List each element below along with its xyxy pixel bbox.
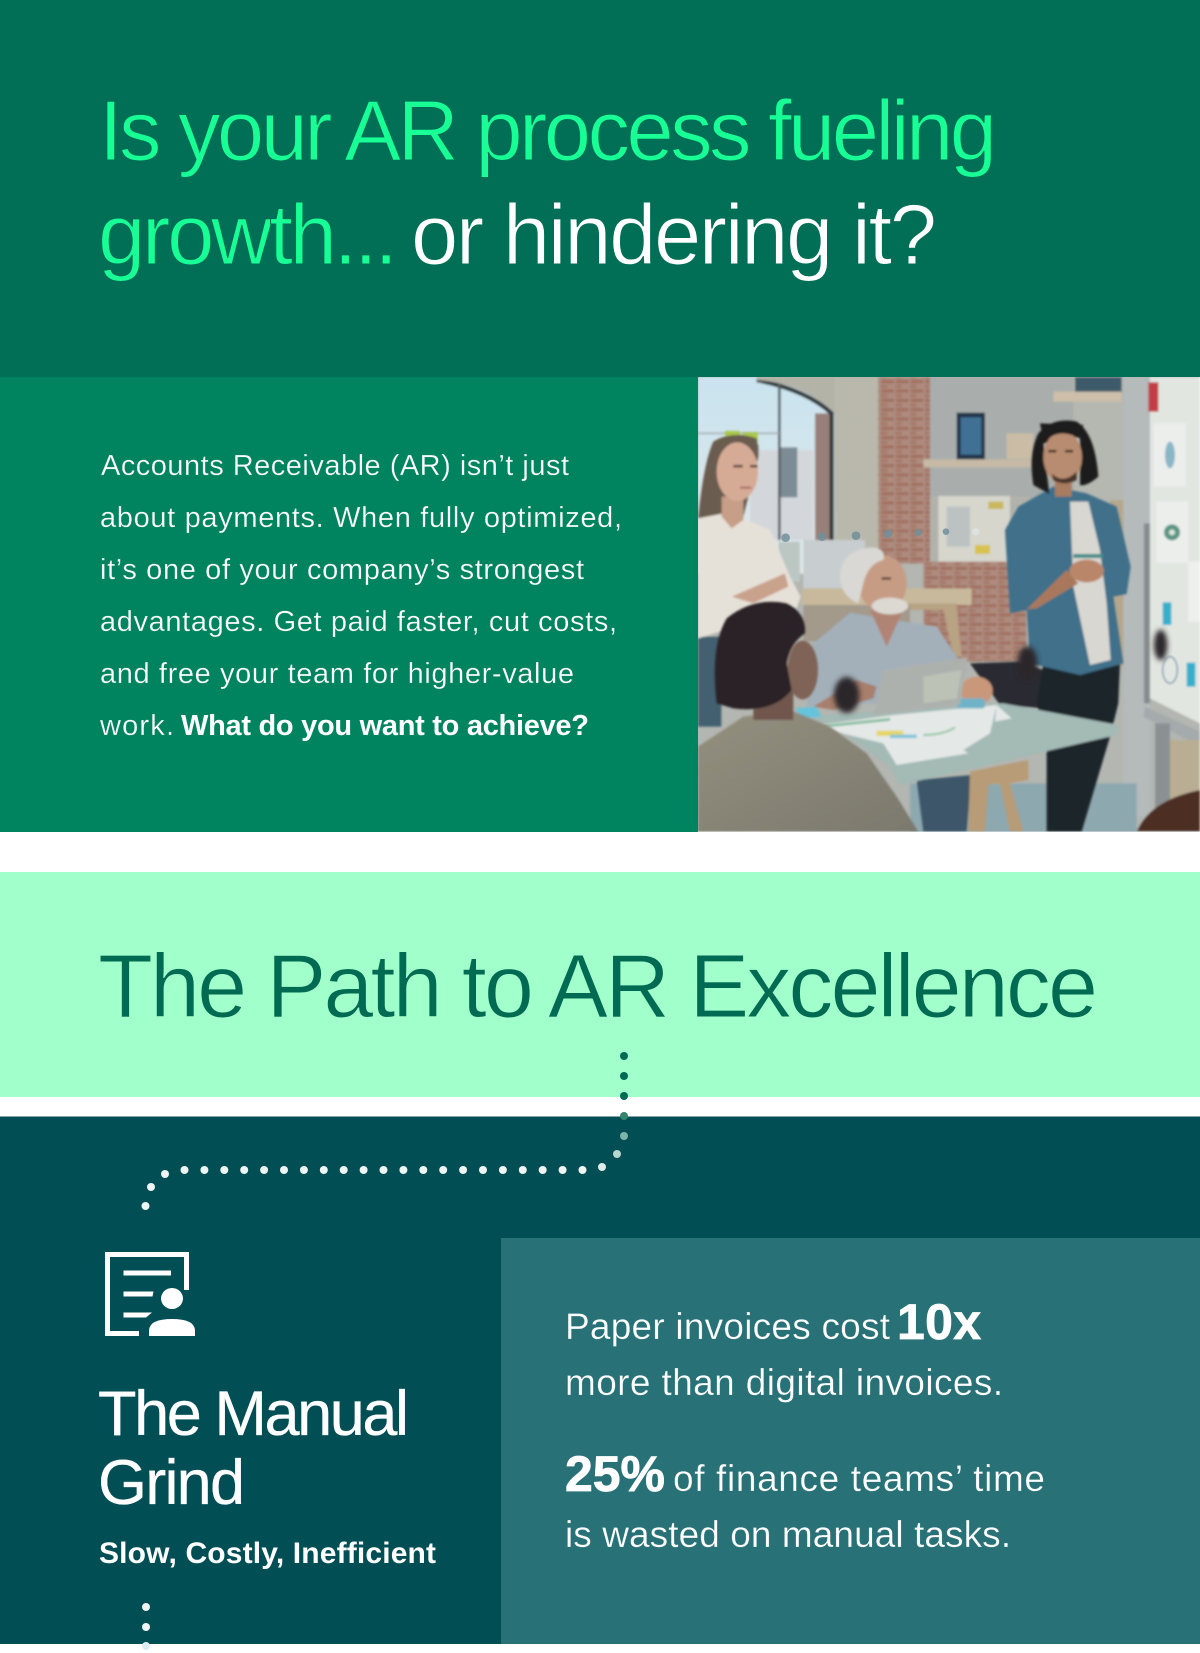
- panel: hero header: [0, 0, 1200, 377]
- trestle: [968, 760, 1028, 832]
- cup: [957, 698, 985, 708]
- papers: [812, 705, 997, 765]
- stat: paper invoices: [565, 1294, 1003, 1403]
- intro paragraph: work.: [99, 710, 174, 742]
- heading: The Path to AR Excellence: [98, 937, 1098, 1037]
- stat: paper invoices: Paper invoices cost: [565, 1306, 891, 1347]
- title: [98, 84, 997, 283]
- panel: statistics: [501, 1238, 1200, 1644]
- woman: [698, 436, 758, 520]
- intro paragraph: [99, 450, 622, 742]
- panel: the manual grind section: [0, 1116, 1200, 1644]
- glass dots: [781, 528, 979, 542]
- intro paragraph: and free your team for higher-value: [100, 658, 574, 690]
- title: or hindering it?: [411, 188, 937, 283]
- intro paragraph: about payments. When fully optimized,: [100, 502, 622, 534]
- section subtitle: Slow, Costly, Inefficient: [99, 1537, 436, 1570]
- stat: wasted time: is wasted on manual tasks.: [565, 1514, 1011, 1555]
- standing man trousers: [1037, 663, 1120, 832]
- sticky notes behind woman: [725, 431, 740, 439]
- laptop: [874, 657, 967, 715]
- chair: [970, 662, 1043, 708]
- section title: [98, 1379, 409, 1518]
- panel: introduction: [0, 377, 698, 832]
- standing man shirt: [1005, 487, 1131, 675]
- seated man shirt: [807, 613, 968, 707]
- table: [800, 703, 1118, 785]
- intro paragraph: Accounts Receivable (AR) isn’t just: [101, 450, 569, 482]
- panel: path heading band: [0, 872, 1200, 1097]
- title: growth...: [98, 188, 398, 283]
- intro paragraph: What do you want to achieve?: [181, 710, 589, 742]
- foreground person: [698, 710, 918, 832]
- photo: team meeting at a whiteboard: [690, 370, 1200, 840]
- blurred markers on glass: [834, 630, 1167, 713]
- section title: Grind: [98, 1448, 245, 1518]
- stat: wasted time: 25%: [565, 1446, 665, 1502]
- intro paragraph: advantages. Get paid faster, cut costs,: [100, 606, 617, 638]
- stat: paper invoices: 10x: [897, 1294, 981, 1350]
- section title: The Manual: [98, 1379, 409, 1449]
- seated man legs: [917, 775, 972, 832]
- stat: wasted time: [565, 1446, 1045, 1555]
- stat: wasted time: of finance teams’ time: [673, 1458, 1045, 1499]
- title: Is your AR process fueling: [99, 84, 997, 179]
- intro paragraph: it’s one of your company’s strongest: [100, 554, 584, 586]
- icon: document with person: [108, 1254, 195, 1336]
- dotted connector path: [142, 1052, 628, 1650]
- stat: paper invoices: more than digital invoices.: [565, 1362, 1003, 1403]
